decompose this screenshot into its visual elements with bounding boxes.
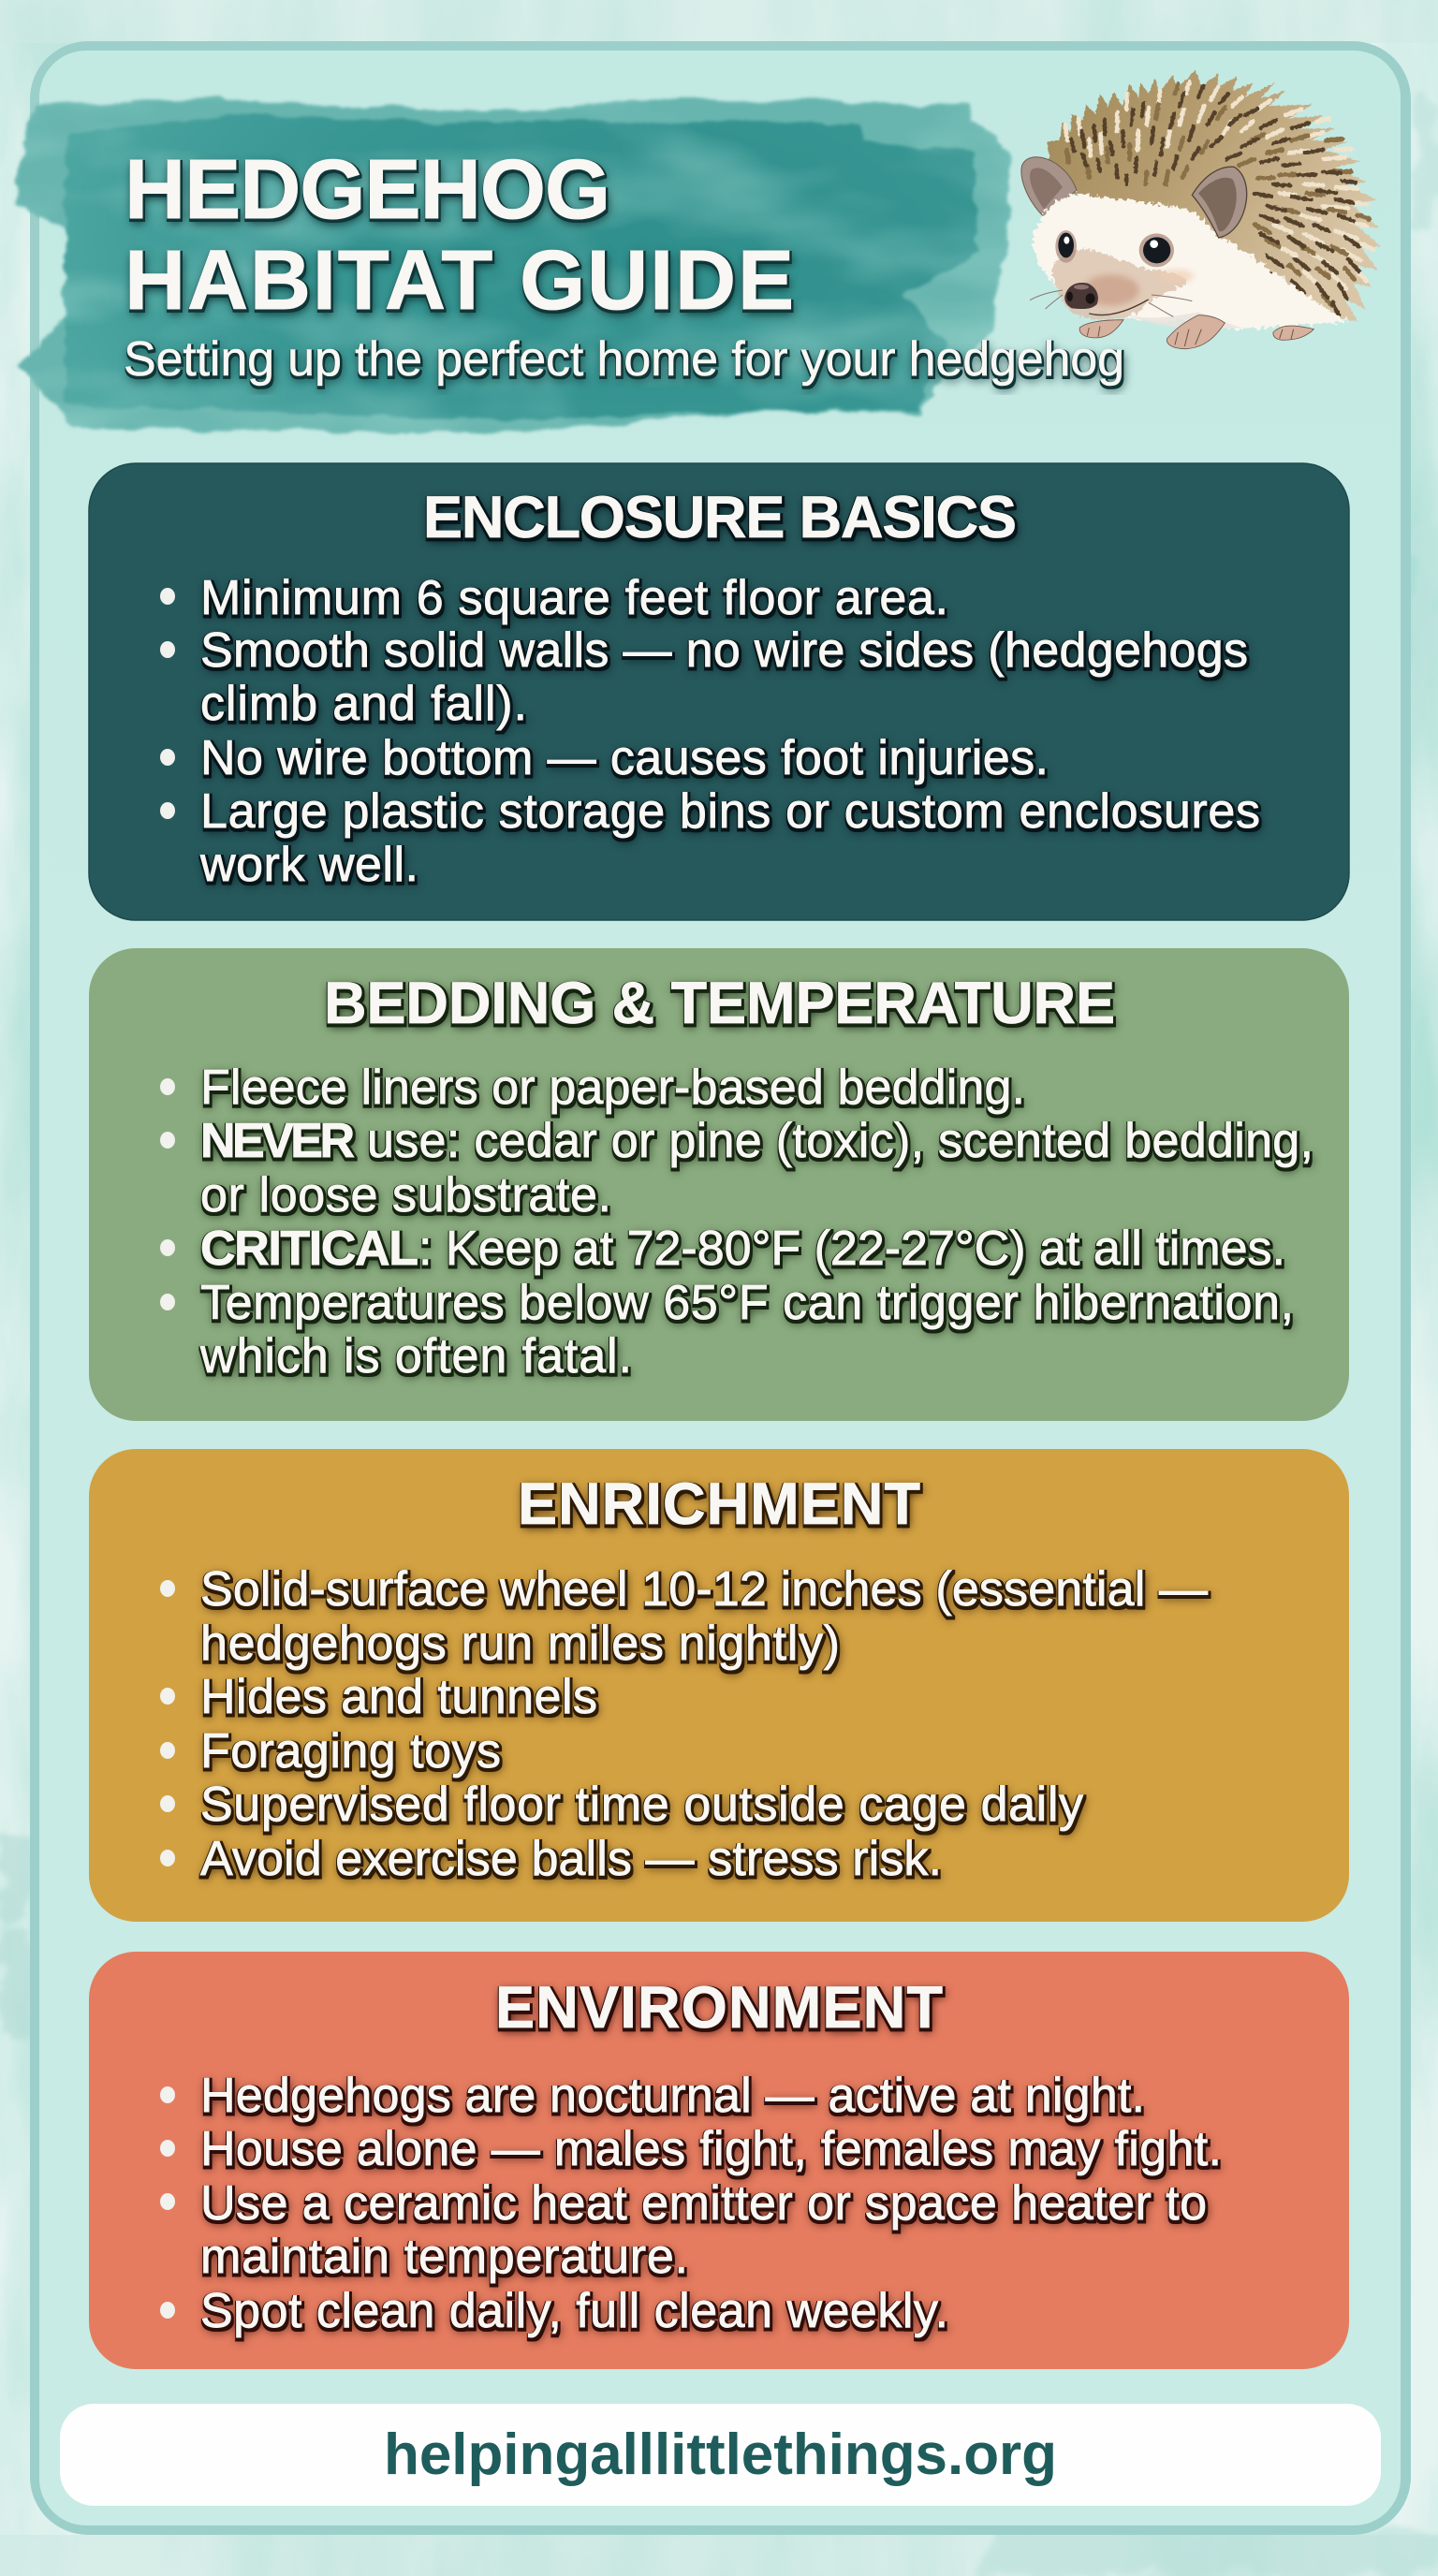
bullet list text: Fleece liners or paper-based bedding. [200, 1061, 1025, 1115]
website address: helpingalllittlethings.org [384, 2422, 1057, 2487]
bullet list text: hedgehogs run miles nightly) [200, 1617, 840, 1671]
bullet list text: Hedgehogs are nocturnal — active at night. [200, 2069, 1145, 2123]
heading: environment: ENVIRONMENT [495, 1975, 943, 2041]
bullet list text: House alone — males fight, females may fight. [200, 2122, 1222, 2176]
bullet markers [160, 2086, 175, 2319]
bullet markers [160, 588, 175, 819]
heading: enclosure basics: ENCLOSURE BASICS [423, 485, 1017, 550]
bullet list text: Avoid exercise balls — stress risk. [200, 1832, 942, 1886]
bullet list text: Foraging toys [200, 1724, 501, 1778]
bullet list text: Smooth solid walls — no wire sides (hedgehogs [200, 623, 1248, 678]
panel: enclosure basics [89, 463, 1349, 920]
bullet list text: Minimum 6 square feet floor area. [200, 571, 948, 625]
bullet list text: Temperatures below 65°F can trigger hibernation, [200, 1276, 1294, 1330]
bullet list text: Use a ceramic heat emitter or space heater to [200, 2176, 1207, 2231]
bullet list text: CRITICAL [200, 1222, 418, 1276]
heading: enrichment: ENRICHMENT [518, 1471, 920, 1537]
bullet list text: Solid-surface wheel 10-12 inches (essential — [200, 1562, 1208, 1617]
card background [89, 463, 1349, 920]
bullet list text: No wire bottom — causes foot injuries. [200, 731, 1049, 785]
bullet list text: climb and fall). [200, 677, 527, 731]
bullet list text [199, 571, 1260, 892]
footer background [60, 2404, 1381, 2506]
bullet list text: use: cedar or pine (toxic), scented bedding, [367, 1114, 1313, 1168]
card background [89, 948, 1349, 1421]
bullet list text: Spot clean daily, full clean weekly. [200, 2284, 948, 2338]
bullet list text: NEVER [200, 1114, 355, 1168]
bullet markers [160, 1580, 175, 1866]
bullet list text: or loose substrate. [200, 1168, 611, 1222]
bullet list text [200, 2069, 1222, 2338]
panel: enrichment [89, 1449, 1349, 1922]
header watercolor banner [14, 99, 1009, 433]
card background [89, 1952, 1349, 2369]
bullet list text: which is often fatal. [199, 1329, 632, 1383]
footer bar with website [60, 2404, 1381, 2506]
heading: main title [125, 143, 794, 328]
bullet list text: Large plastic storage bins or custom enclosures [200, 784, 1260, 839]
bullet list text: maintain temperature. [200, 2230, 688, 2284]
bullet list text: Supervised floor time outside cage daily [200, 1778, 1083, 1832]
panel: environment [89, 1952, 1349, 2369]
bullet list text: work well. [199, 838, 418, 892]
bullet list text [200, 1562, 1208, 1886]
bullet list text: Hides and tunnels [200, 1670, 597, 1724]
heading: main title: HABITAT GUIDE [125, 234, 794, 328]
heading: main title: HEDGEHOG [125, 143, 610, 237]
heading: bedding and temperature: BEDDING & TEMPERATURE [324, 971, 1115, 1036]
card background [89, 1449, 1349, 1922]
bullet markers [160, 1078, 175, 1310]
panel: bedding and temperature [89, 948, 1349, 1421]
subtitle: Setting up the perfect home for your hedgehog [124, 332, 1124, 387]
icon: watercolor hedgehog illustration [1021, 70, 1381, 349]
bullet list text: : Keep at 72-80°F (22-27°C) at all times. [418, 1222, 1285, 1276]
bullet list text [199, 1061, 1313, 1383]
